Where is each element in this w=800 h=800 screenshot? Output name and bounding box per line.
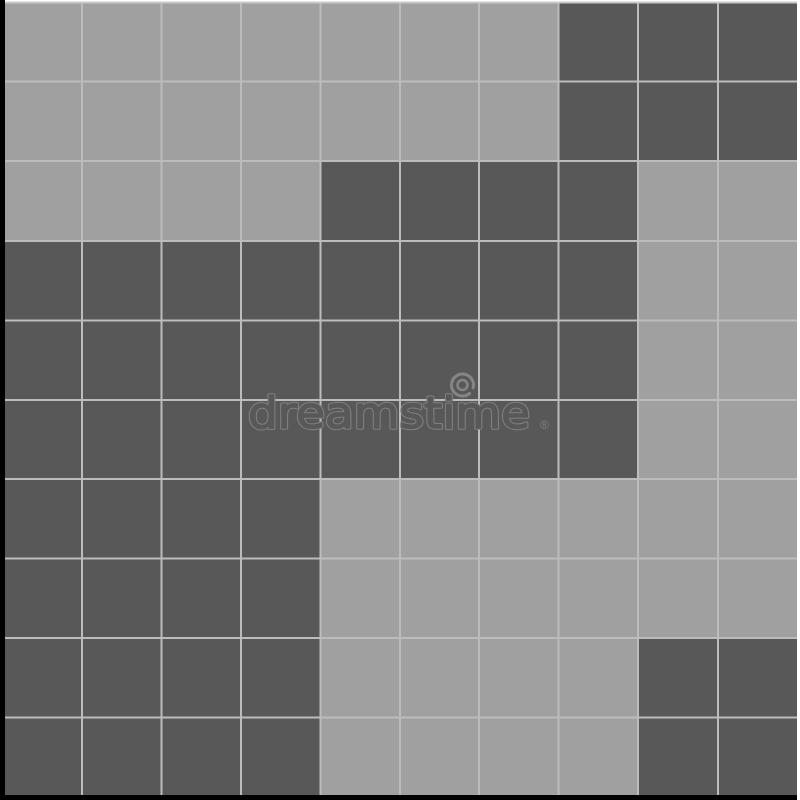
watermark: registered mark: ® [540, 418, 549, 432]
watermark: text: dreamstime [248, 388, 530, 439]
light region: right and lower centre [320, 161, 797, 795]
bottom black border [0, 795, 797, 800]
watermark: spiral logo [447, 370, 478, 400]
left black border [0, 0, 5, 800]
watermark: text: dreamstime [248, 388, 530, 439]
light region: top left [5, 2, 558, 241]
